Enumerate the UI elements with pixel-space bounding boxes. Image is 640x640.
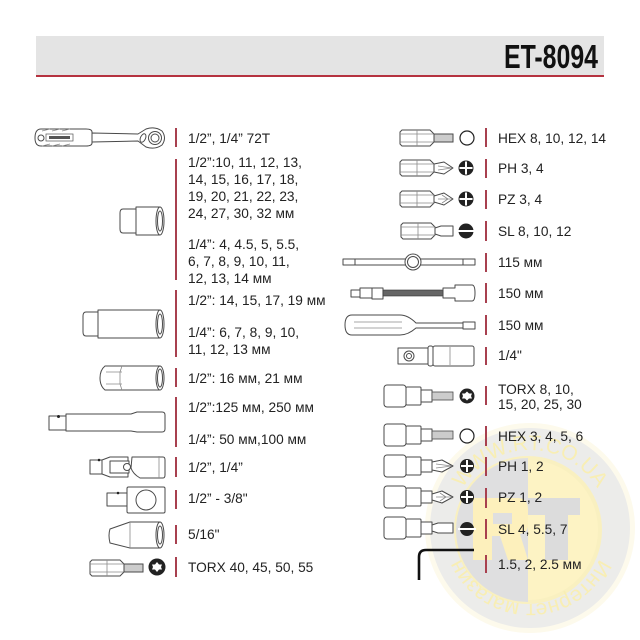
icon: PH bit socket xyxy=(384,455,453,477)
icon: hex profile xyxy=(460,429,474,443)
label: 1/2” - 3/8" xyxy=(188,491,248,506)
icon: bit holder socket xyxy=(109,522,164,548)
row: long PZ bits xyxy=(384,486,542,508)
row: hex bits xyxy=(400,128,606,147)
icon: hex bit xyxy=(400,130,453,146)
icon: torx profile xyxy=(148,558,166,576)
row: extension bars xyxy=(49,397,314,447)
row: drive adapter xyxy=(107,487,248,513)
row: sockets xyxy=(120,155,302,286)
label: 12, 13, 14 мм xyxy=(188,271,272,286)
icon: SL profile xyxy=(457,224,475,238)
label: 115 мм xyxy=(498,255,542,270)
label: 11, 12, 13 мм xyxy=(188,342,270,357)
icon: drive adapter xyxy=(107,487,165,513)
label: 150 мм xyxy=(498,286,543,301)
icon: deep socket xyxy=(83,310,164,338)
row: deep sockets xyxy=(83,290,326,357)
label: 5/16" xyxy=(188,527,220,542)
label: HEX 8, 10, 12, 14 xyxy=(498,131,606,146)
label: 1/2”: 14, 15, 17, 19 мм xyxy=(188,293,326,308)
row: long torx bits xyxy=(384,382,582,412)
icon: PZ bit socket xyxy=(384,486,453,508)
label: 1/2”, 1/4” xyxy=(188,460,243,475)
label: SL 8, 10, 12 xyxy=(498,224,571,239)
left column xyxy=(35,128,326,577)
row: PH bits xyxy=(400,159,544,178)
row: universal joint xyxy=(90,456,243,478)
label: 1/4”: 4, 4.5, 5, 5.5, xyxy=(188,237,299,252)
icon: SL bit socket xyxy=(384,517,453,539)
row: bit holder xyxy=(109,522,220,548)
row: long hex bits xyxy=(384,424,584,446)
icon: PZ bit xyxy=(400,191,453,207)
icon: short socket xyxy=(100,366,164,390)
row: spinner handle xyxy=(345,315,543,335)
icon: PZ profile xyxy=(460,490,474,504)
row: PZ bits xyxy=(400,190,543,209)
label: PH 1, 2 xyxy=(498,459,544,474)
label: PZ 1, 2 xyxy=(498,490,542,505)
row: long PH bits xyxy=(384,455,544,477)
row: long SL bits xyxy=(384,517,568,539)
icon: tap wrench xyxy=(343,254,475,270)
icon: SL profile xyxy=(458,522,476,536)
icon: hex adapter xyxy=(398,346,474,366)
label: TORX 8, 10, xyxy=(498,382,574,397)
header band xyxy=(36,36,604,77)
label: TORX 40, 45, 50, 55 xyxy=(188,560,314,575)
label: 1.5, 2, 2.5 мм xyxy=(498,557,582,572)
icon: PZ profile xyxy=(458,192,474,206)
right column xyxy=(343,128,606,580)
row: spark plug sockets xyxy=(100,366,302,390)
label: HEX 3, 4, 5, 6 xyxy=(498,429,584,444)
icon: PH bit xyxy=(400,160,453,176)
label: SL 4, 5.5, 7 xyxy=(498,522,568,537)
icon: PH profile xyxy=(460,459,474,473)
label: 15, 20, 25, 30 xyxy=(498,397,582,412)
watermark: RT shop seal xyxy=(425,423,635,633)
label: 1/2”: 16 мм, 21 мм xyxy=(188,371,302,386)
icon: hex profile xyxy=(460,131,474,145)
row: torx bits xyxy=(90,557,314,577)
icon: hex bit socket xyxy=(384,424,453,446)
row: tap wrench xyxy=(343,253,542,272)
icon: torx bit socket xyxy=(384,385,453,407)
row: SL bits xyxy=(401,221,571,241)
icon: ratchet xyxy=(35,128,164,148)
label: 1/4" xyxy=(498,348,522,363)
label: 1/2”:125 мм, 250 мм xyxy=(188,400,314,415)
label: 1/4”: 6, 7, 8, 9, 10, xyxy=(188,325,299,340)
icon: universal joint xyxy=(90,456,165,478)
label: 24, 27, 30, 32 мм xyxy=(188,206,294,221)
icon: allen key xyxy=(419,550,474,580)
label: 14, 15, 16, 17, 18, xyxy=(188,172,298,187)
watermark: RT shop seal: WWW.RT.CO.UA xyxy=(451,436,606,488)
icon: torx profile xyxy=(460,388,474,404)
row: ratchet xyxy=(35,128,271,148)
icon: PH profile xyxy=(458,160,474,176)
icon: flexible shaft xyxy=(351,285,475,301)
label: 6, 7, 8, 9, 10, 11, xyxy=(188,254,290,269)
row: flex shaft xyxy=(351,283,543,303)
row: allen keys xyxy=(419,550,582,580)
label: 1/2”, 1/4” 72T xyxy=(188,131,271,146)
icon: extension bar xyxy=(49,412,165,432)
icon: socket xyxy=(120,207,164,235)
label: PZ 3, 4 xyxy=(498,192,543,207)
title: ET-8094 xyxy=(504,38,598,75)
label: 1/4”: 50 мм,100 мм xyxy=(188,432,306,447)
row: hex adapter xyxy=(398,346,522,366)
icon: spinner handle xyxy=(345,315,475,335)
icon: SL bit xyxy=(401,223,453,239)
watermark: RT shop seal: Интернет магазин xyxy=(451,560,612,616)
icon: torx bit xyxy=(90,560,143,576)
label: 19, 20, 21, 22, 23, xyxy=(188,189,298,204)
label: 150 мм xyxy=(498,318,543,333)
label: PH 3, 4 xyxy=(498,161,544,176)
label: 1/2”:10, 11, 12, 13, xyxy=(188,155,302,170)
